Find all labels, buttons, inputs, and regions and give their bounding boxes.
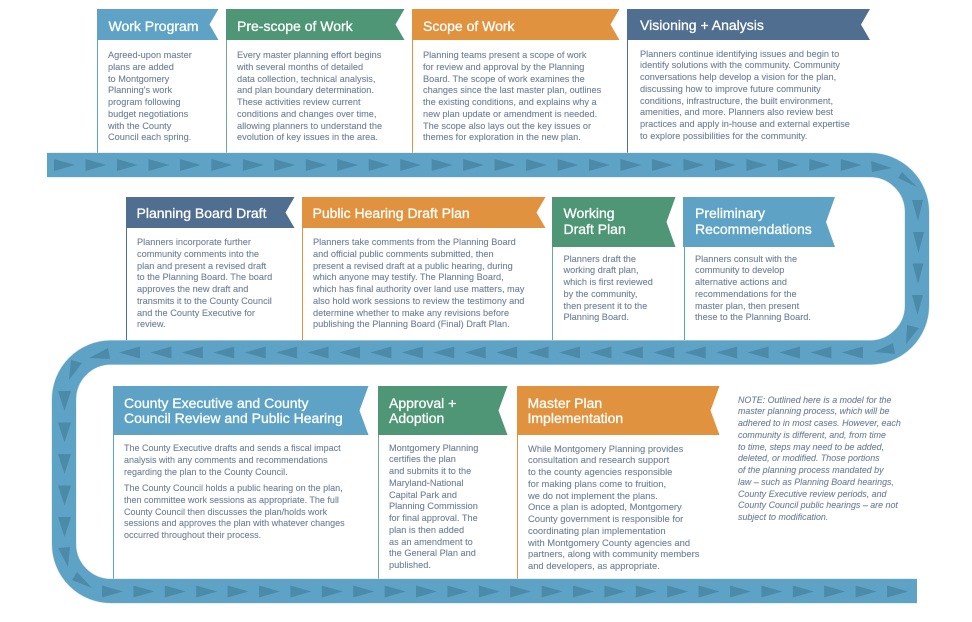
text: Planning Board Draft description: Planners incorporate further [137, 237, 251, 247]
heading: County Executive and County Council Review and Public Hearing [112, 386, 368, 435]
text: Approval description: and submits it to the [389, 466, 471, 476]
text: Public Hearing description: publishing the Planning Board (Final) Draft Plan. [313, 319, 510, 329]
heading: Work Program [96, 9, 218, 40]
note text: community is different, and, from time [738, 430, 886, 440]
text: Master Plan description: we do not implement the plans. [528, 490, 658, 500]
text: Scope of Work description: the existing conditions, and explains why a [423, 97, 597, 107]
text: Working Draft description: then present it to the [564, 300, 647, 310]
text: County Executive paragraph: The County Executive drafts and sends a fiscal impact [124, 443, 341, 453]
text: Work Program description: with the County [108, 120, 171, 130]
heading: Working Draft Plan: Draft Plan [564, 221, 626, 237]
note text: subject to modification. [738, 512, 828, 522]
text: Pre-scope description: allowing planners to understand the [237, 120, 382, 130]
text: Scope of Work description: changes since the last master plan, outlines [423, 85, 601, 95]
panel: Scope of Work [412, 9, 627, 154]
heading: Preliminary Recommendations: Recommendations [695, 221, 812, 237]
panel: Pre-scope of Work [226, 9, 412, 154]
text: Visioning description [640, 48, 850, 141]
text: Master Plan description: and developers, as appropriate. [528, 560, 660, 571]
text: County Executive paragraph [124, 443, 341, 477]
ribbon band [47, 165, 917, 591]
text: Master Plan description: partners, along with community members [528, 548, 699, 559]
text: Work Program description: to Montgomery [108, 74, 169, 84]
text: Public Hearing description: determine whether to make any revisions before [313, 308, 509, 318]
heading: Working Draft Plan [552, 197, 676, 247]
text: Work Program description: Agreed-upon master [108, 50, 192, 60]
panel: Master Plan Implementation [517, 386, 721, 580]
text: Pre-scope description: and plan boundary determination. [237, 85, 374, 95]
text: County Council paragraph: The County Council holds a public hearing on the plan, [124, 483, 343, 493]
text: Public Hearing description: and official public comments submitted, then [313, 249, 494, 259]
note text: NOTE: Outlined here is a model for the [738, 394, 891, 404]
note text: master planning process, which will be [738, 406, 889, 416]
heading: Public Hearing Draft Plan [302, 197, 546, 228]
text: Master Plan description: consultation and research support [528, 454, 669, 465]
text: Working Draft description: working draft plan, [564, 265, 639, 275]
heading: Master Plan Implementation: Implementation [528, 410, 623, 426]
heading: Work Program: Work Program [108, 18, 198, 34]
panel: Preliminary Recommendations [684, 197, 836, 341]
text: Scope of Work description: The scope also lays out the key issues or [423, 120, 591, 130]
text: Preliminary Recommendations description: community to develop [695, 265, 784, 275]
note text: County Executive review periods, and [738, 488, 886, 498]
text: Planning Board Draft description [137, 237, 272, 329]
text: Public Hearing description: present a revised draft at a public hearing, during [313, 260, 513, 270]
panel: Public Hearing Draft Plan [302, 197, 552, 341]
text: Work Program description [108, 50, 192, 142]
text: County Executive paragraph: regarding the plan to the County Council. [124, 466, 288, 476]
direction arrows [54, 159, 924, 598]
text: Visioning description: discussing how to improve future community [640, 84, 821, 94]
text: Scope of Work description: for review and approval by the Planning [423, 62, 584, 72]
heading: Approval + Adoption: Approval + [389, 395, 456, 411]
text: Approval description [389, 442, 478, 570]
heading: Preliminary Recommendations [683, 197, 835, 247]
text: Working Draft description: by the community, [564, 289, 637, 299]
text: Public Hearing description: also hold work sessions to review the testimony and [313, 296, 524, 306]
note text: County Council public hearings – are not [738, 500, 898, 510]
text: Work Program description: budget negotiations [108, 109, 188, 119]
note text: deleted, or modified. Those portions [738, 453, 880, 463]
heading: Planning Board Draft: Planning Board Draft [136, 205, 266, 221]
text: Preliminary Recommendations description: alternative actions and [695, 277, 787, 287]
text: Scope of Work description: Planning teams present a scope of work [423, 50, 586, 60]
text: Work Program description: plans are added [108, 62, 174, 72]
heading: County Executive and County Council Review and Public Hearing: County Executive and County [124, 395, 308, 411]
heading: Public Hearing Draft Plan: Public Hearing Draft Plan [312, 205, 470, 221]
text: Planning Board Draft description: plan and present a revised draft [137, 260, 266, 270]
text: Work Program description: Planning's work [108, 85, 172, 95]
panel: Working Draft Plan [552, 197, 683, 341]
text: Pre-scope description: Every master planning effort begins [237, 50, 381, 60]
text: Pre-scope description: with several months of detailed [237, 62, 363, 72]
text: Approval description: Planning Commission [389, 501, 478, 511]
text: Master Plan description: for making plans come to fruition, [528, 478, 666, 489]
panel: County Executive and County Council Review [113, 386, 378, 580]
heading: Approval + Adoption: Adoption [389, 410, 444, 426]
text: Scope of Work description: Board. The scope of work examines the [423, 74, 585, 84]
note text: to time, steps may need to be added, [738, 442, 884, 452]
text: Visioning description: to explore possibilities for the community. [640, 131, 807, 141]
text: Work Program description: Council each spring. [108, 132, 191, 142]
text: Visioning description: identify solutions with the community. Community [640, 60, 840, 70]
text: Planning Board Draft description: to the Planning Board. The board [137, 272, 272, 282]
heading: Master Plan Implementation: Master Plan [528, 395, 602, 411]
heading: Visioning + Analysis: Visioning + Analysis [640, 17, 764, 33]
text: Pre-scope description: These activities review current [237, 97, 361, 107]
note text: of the planning process mandated by [738, 465, 884, 475]
heading: Planning Board Draft [126, 197, 294, 228]
heading: County Executive and County Council Review and Public Hearing: Council Review and Public Hearing [124, 410, 343, 426]
text: County Council paragraph: sessions and approves the plan with whatever changes [124, 518, 345, 528]
heading: Visioning + Analysis [626, 9, 870, 40]
text: Working Draft description: Planners draft the [564, 254, 636, 264]
text: Preliminary Recommendations description: Planners consult with the [695, 254, 797, 264]
text: County Executive paragraph: analysis with any comments and recommendations [124, 455, 328, 465]
text: Pre-scope description: evolution of key issues in the area. [237, 132, 378, 142]
text: Public Hearing description [313, 237, 524, 329]
heading: Pre-scope of Work [226, 9, 404, 40]
text: Planning Board Draft description: community comments into the [137, 249, 259, 259]
text: Pre-scope description: conditions and changes over time, [237, 109, 376, 119]
text: Approval description: as an amendment to [389, 536, 473, 546]
text: Visioning description: practices and apply in-house and external expertise [640, 119, 850, 129]
heading: Approval + Adoption [378, 386, 508, 435]
text: Approval description: published. [389, 560, 431, 570]
note text: adhered to in most cases. However, each [738, 418, 901, 428]
text: Master Plan description: to the county agencies responsible [528, 466, 672, 477]
panel: Work Program [97, 9, 226, 154]
heading: Master Plan Implementation [516, 386, 720, 435]
text: Approval description: plan is then added [389, 525, 464, 535]
heading: Preliminary Recommendations: Preliminary [695, 205, 765, 221]
text: Approval description: for final approval. The [389, 513, 478, 523]
text: Public Hearing description: Planners take comments from the Planning Board [313, 237, 516, 247]
note text: law – such as Planning Board hearings, [738, 477, 894, 487]
text: Approval description: Montgomery Planning [389, 442, 478, 452]
text: Work Program description: program following [108, 97, 181, 107]
text: Visioning description: conditions, infrastructure, the built environment, [640, 96, 833, 106]
text: Master Plan description: with Montgomery County agencies and [528, 536, 690, 548]
text: Pre-scope description [237, 50, 382, 142]
text: Working Draft description [564, 254, 653, 322]
text: Approval description: Maryland-National [389, 478, 464, 488]
text: Preliminary Recommendations description: master plan, then present [695, 300, 799, 310]
text: Planning Board Draft description: approves the new draft and [137, 284, 248, 294]
text: Visioning description: Planners continue identifying issues and begin to [640, 48, 839, 58]
text: Approval description: Capital Park and [389, 490, 457, 500]
heading: Working Draft Plan: Working [564, 205, 615, 221]
note text [738, 394, 901, 522]
text: Master Plan description: Once a plan is adopted, Montgomery [528, 501, 682, 512]
text: Working Draft description: which is first reviewed [564, 277, 653, 287]
text: Master Plan description: coordinating plan implementation [528, 525, 666, 536]
text: Preliminary Recommendations description: these to the Planning Board. [695, 312, 811, 322]
panel: Planning Board Draft [126, 197, 302, 341]
text: Scope of Work description: themes for exploration in the new plan. [423, 132, 581, 142]
text: Visioning description: conversations help develop a vision for the plan, [640, 72, 836, 82]
text: Working Draft description: Planning Board. [564, 312, 629, 322]
text: Pre-scope description: data collection, technical analysis, [237, 74, 375, 84]
text: Master Plan description: County government is responsible for [528, 513, 683, 524]
heading: Scope of Work [412, 9, 620, 40]
text: County Council paragraph: County Council then discusses the plan/holds work [124, 506, 327, 516]
text: Public Hearing description: which anyone may testify. The Planning Board, [313, 272, 504, 282]
text: Master Plan description: While Montgomery Planning provides [528, 442, 683, 454]
text: Preliminary Recommendations description [695, 254, 811, 322]
panel: Approval + Adoption [378, 386, 517, 580]
text: Preliminary Recommendations description: recommendations for the [695, 289, 797, 299]
text: Planning Board Draft description: review. [137, 319, 166, 329]
text: Planning Board Draft description: transmits it to the County Council [137, 296, 272, 306]
text: County Council paragraph: occurred throughout their process. [124, 530, 261, 540]
text: County Council paragraph [124, 483, 345, 540]
text: Public Hearing description: which has final authority over land use matters, may [313, 284, 524, 294]
text: Approval description: the General Plan and [389, 548, 476, 558]
text: Scope of Work description: new plan update or amendment is needed. [423, 109, 597, 119]
text: Scope of Work description [423, 50, 601, 142]
panel: Visioning + Analysis [627, 9, 870, 154]
text: Approval description: certifies the plan [389, 454, 456, 464]
text: Visioning description: amenities, and more. Planners also review best [640, 107, 833, 117]
heading: Scope of Work: Scope of Work [423, 18, 515, 34]
text: County Council paragraph: then committee work sessions as appropriate. The full [124, 495, 339, 505]
text: Master Plan description [528, 442, 700, 571]
heading: Pre-scope of Work: Pre-scope of Work [237, 18, 353, 34]
text: Planning Board Draft description: and the County Executive for [137, 308, 255, 318]
